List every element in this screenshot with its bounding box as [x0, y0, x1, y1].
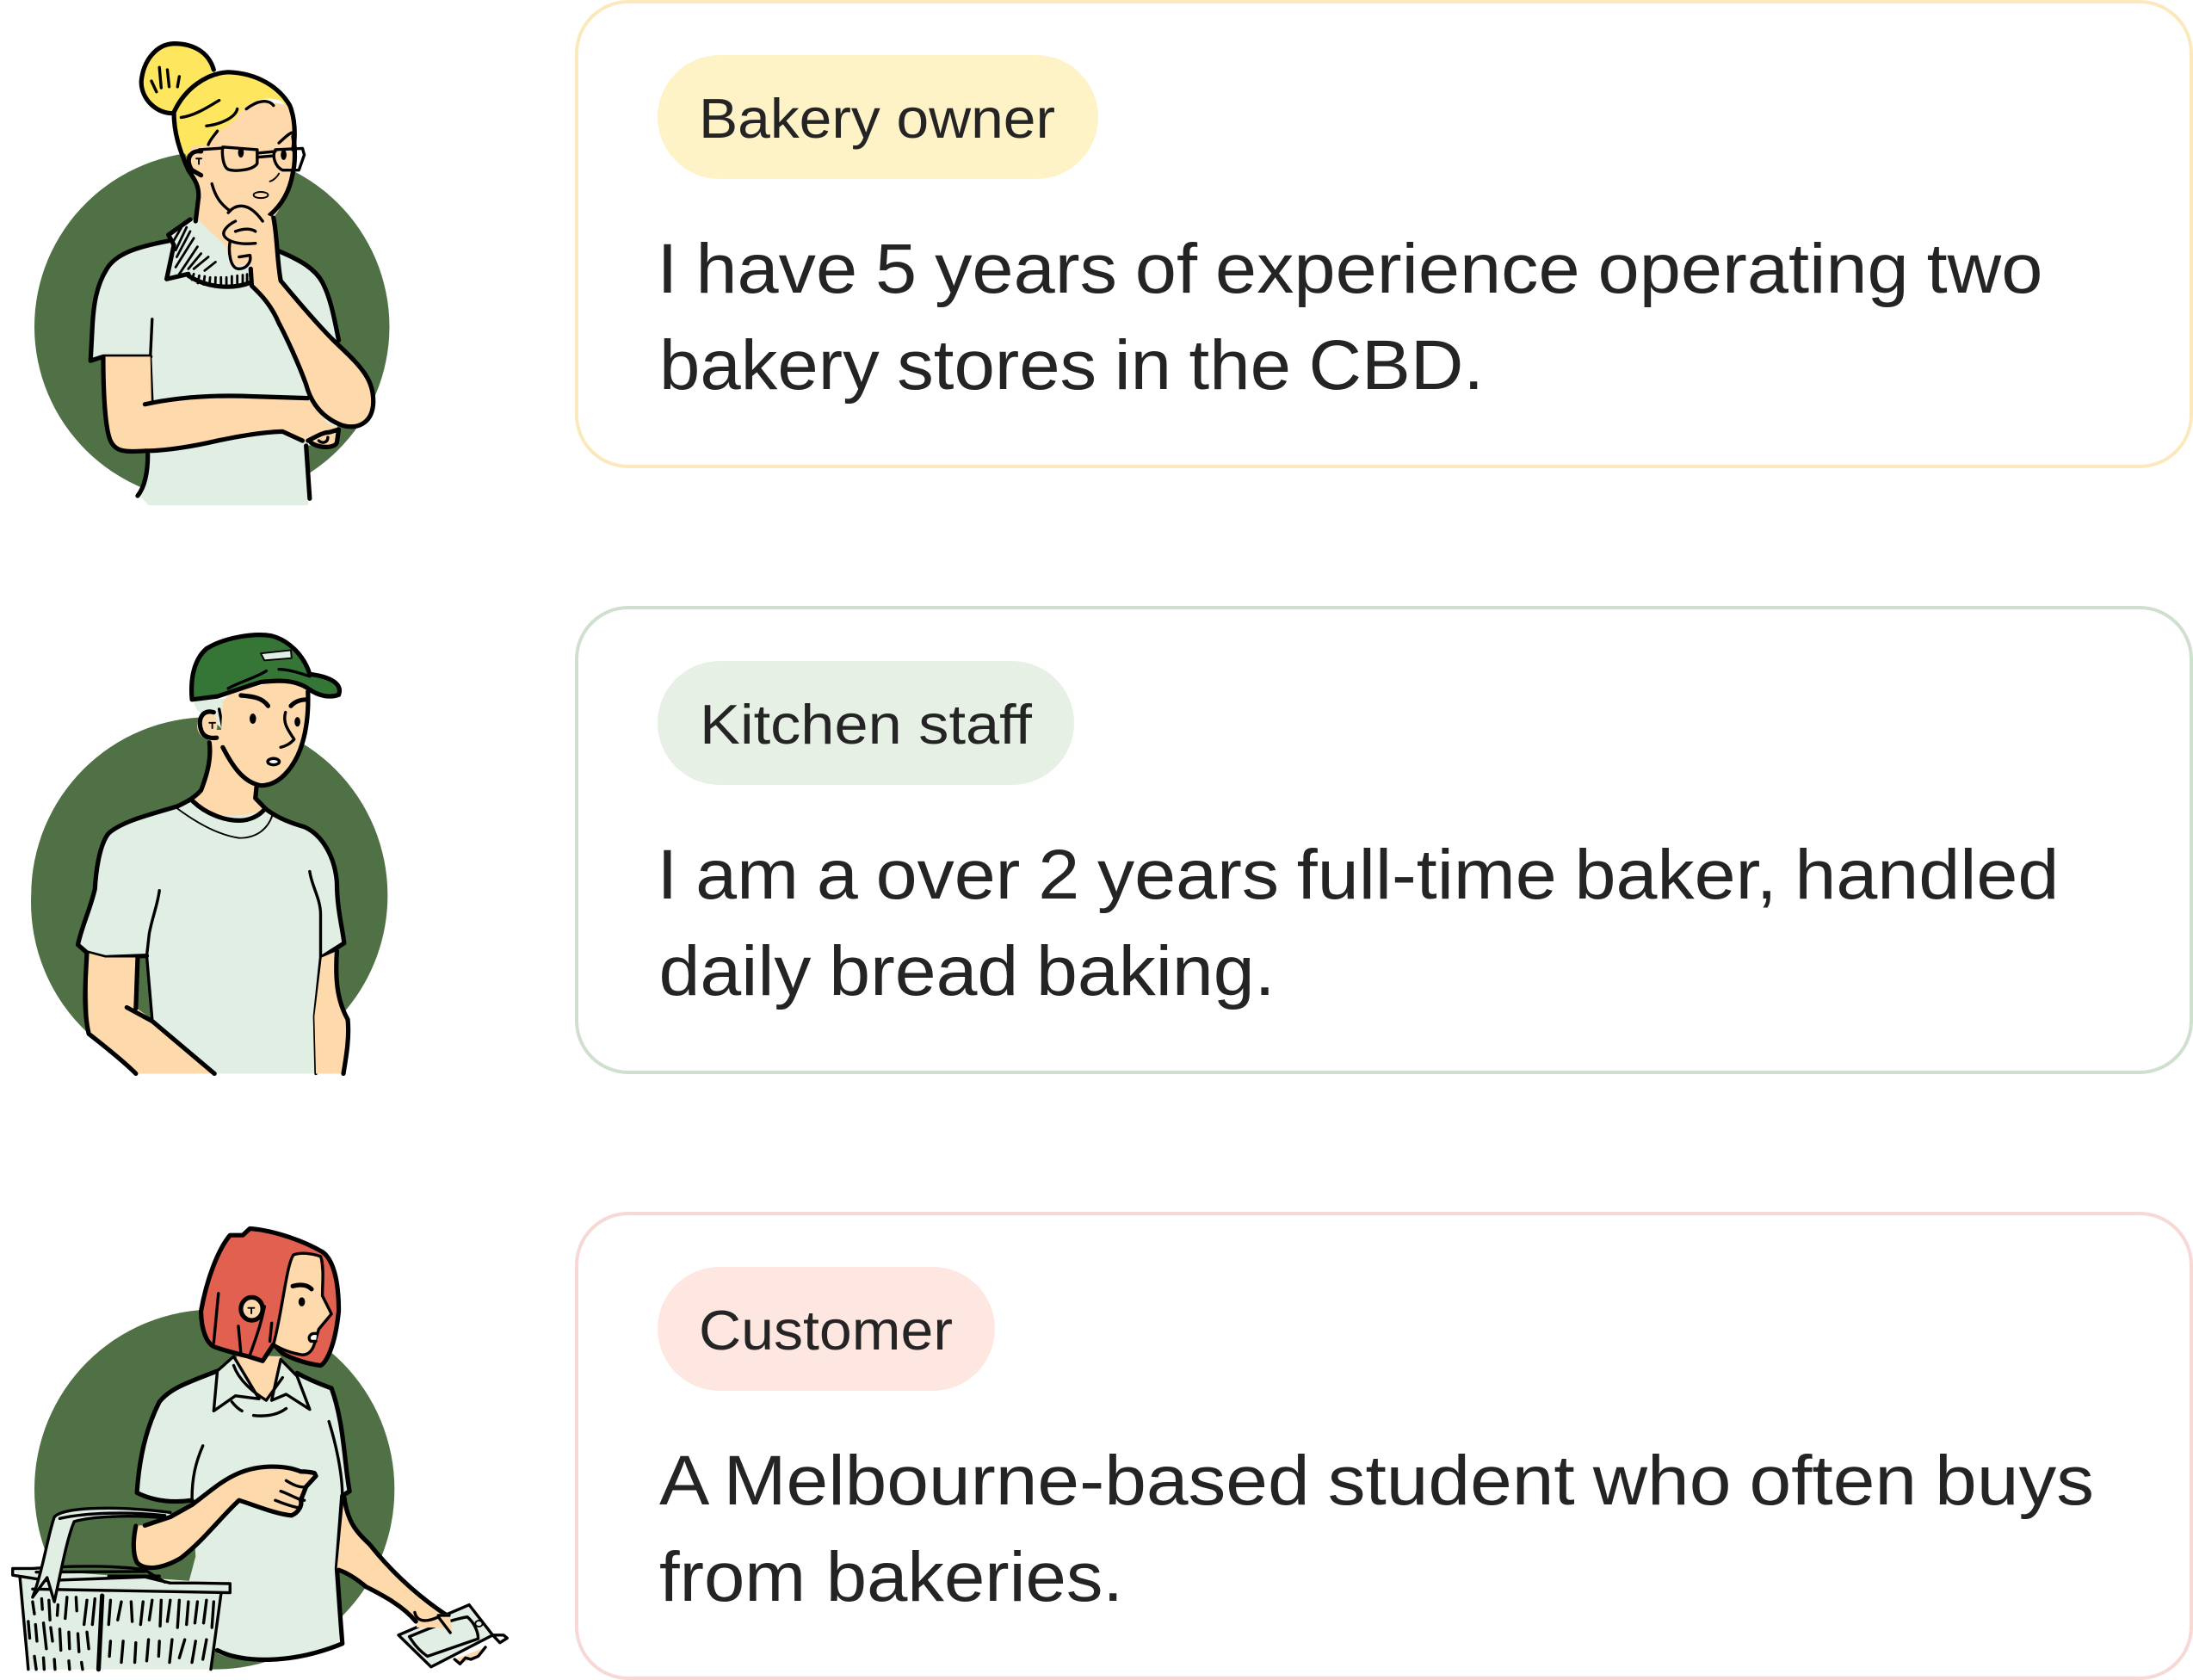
- neck: [236, 1355, 282, 1400]
- face and neck: [181, 99, 294, 262]
- panel: kitchen staff card: [577, 608, 2191, 1072]
- card outline: [577, 2, 2191, 466]
- ear: [197, 712, 218, 738]
- role tag: [658, 55, 1098, 179]
- description: I am a over 2 years full-time baker, handled: [657, 836, 2059, 914]
- shopping basket: [13, 1508, 230, 1670]
- illustration: bakery owner: [34, 44, 389, 505]
- face: [274, 1253, 331, 1356]
- left arm: [85, 953, 214, 1073]
- description: I have 5 years of experience operating two: [657, 230, 2042, 308]
- red hair: [201, 1228, 339, 1366]
- panel: customer card: [577, 1214, 2191, 1678]
- shirt collar: [213, 1356, 310, 1411]
- green circle backdrop: [34, 1309, 394, 1670]
- ear: [188, 151, 201, 176]
- panel: bakery owner card: [577, 2, 2191, 466]
- card outline: [577, 1214, 2191, 1678]
- description: from bakeries.: [659, 1538, 1123, 1616]
- description: [657, 230, 2042, 405]
- ear: [241, 1297, 263, 1320]
- neck: [177, 730, 287, 820]
- hair: [194, 698, 232, 730]
- t-shirt: [77, 801, 344, 1073]
- role tag: Customer: [699, 1299, 953, 1362]
- description: [657, 836, 2059, 1010]
- blonde hair: [173, 72, 294, 197]
- t-shirt: [137, 1371, 349, 1660]
- crossed arm: [103, 356, 339, 452]
- green cap: [192, 635, 339, 700]
- raised forearm and hand: [224, 204, 374, 427]
- outstretched right arm: [337, 1496, 451, 1632]
- glasses: [199, 147, 305, 170]
- illustration: customer: [13, 1228, 507, 1670]
- description: [659, 1442, 2094, 1616]
- striped collar: [167, 219, 250, 288]
- role tag: Bakery owner: [699, 87, 1055, 150]
- role tag: [658, 661, 1074, 785]
- description: A Melbourne-based student who often buys: [659, 1442, 2094, 1520]
- bent left arm: [133, 1467, 316, 1568]
- illustration: kitchen staff: [31, 635, 387, 1073]
- face: [221, 679, 309, 786]
- role tag: Kitchen staff: [700, 693, 1033, 756]
- t-shirt: [90, 218, 339, 505]
- hair bun: [141, 44, 213, 114]
- role tag: [658, 1267, 995, 1391]
- card outline: [577, 608, 2191, 1072]
- green circle backdrop: [34, 151, 389, 502]
- description: daily bread baking.: [659, 932, 1276, 1010]
- right arm: [314, 951, 349, 1073]
- phone in hand: [398, 1605, 507, 1667]
- description: bakery stores in the CBD.: [659, 326, 1484, 405]
- green circle backdrop: [31, 717, 387, 1034]
